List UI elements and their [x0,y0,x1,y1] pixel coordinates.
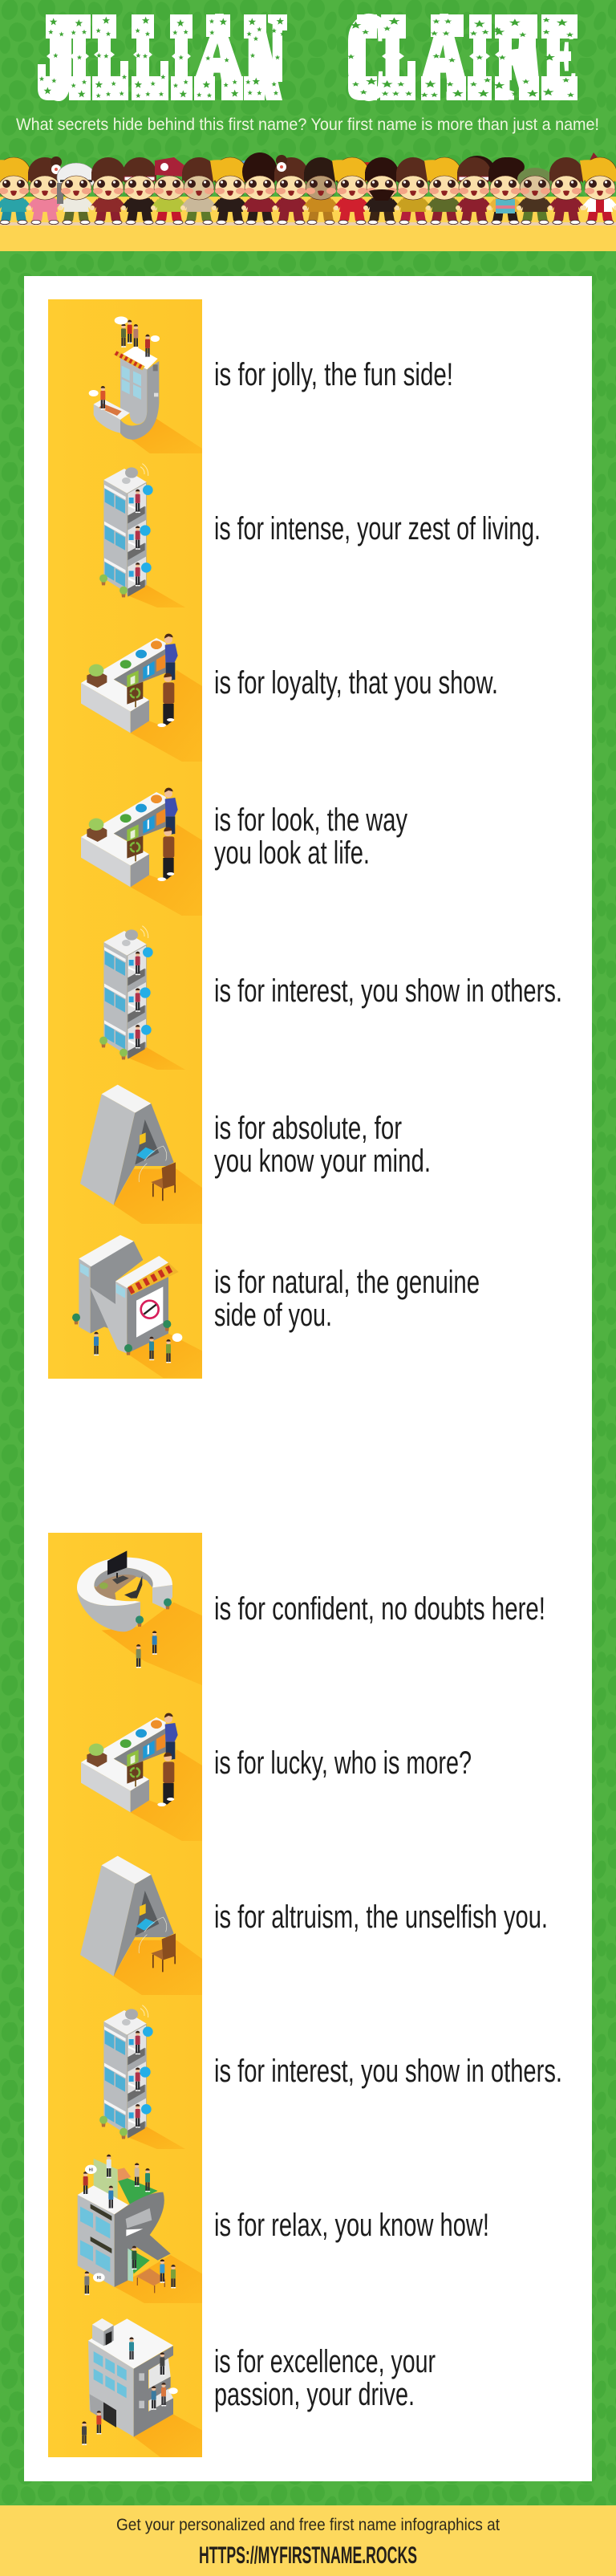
icon: letter L recycling station [81,1713,202,1841]
icon: letter C reception desk [77,1550,202,1685]
caption: L: is for look, the way [214,802,407,838]
icon: letter J building [88,316,202,453]
caption: A: you know your mind. [214,1144,431,1179]
caption: L: you look at life. [214,835,370,871]
last name section: CLAIRE [48,1533,562,2457]
yellow illustration column: JILLIAN [48,299,202,1379]
first name section: JILLIAN [48,299,562,1379]
icon: letter I building [99,463,184,607]
icon: letter I building [99,925,184,1070]
footer url: HTTPS://MYFIRSTNAME.ROCKS [199,2542,417,2569]
icon: letter L recycling station [81,634,202,762]
caption: J: is for jolly, the fun side! [214,357,453,392]
caption: R: is for relax, you know how! [214,2208,489,2243]
caption: A: is for absolute, for [214,1111,402,1146]
word block: JILLIAN slab shapes [38,14,287,100]
caption: N: is for natural, the genuine [214,1265,480,1300]
icon: letter R building [77,2154,202,2303]
caption: L: is for lucky, who is more? [214,1745,472,1781]
icon: letter N building [72,1235,202,1378]
yellow illustration column: CLAIRE [48,1533,202,2457]
icon: letter A with chair [80,1085,202,1224]
caption: E: passion, your drive. [214,2377,415,2412]
main white panel [24,276,592,2481]
crowd of cartoon characters [0,152,616,225]
stars on CLAIRE [347,18,574,97]
footer text: Get your personalized and free first name infographics at [116,2516,500,2534]
word block: CLAIRE slab shapes [348,14,578,100]
icon: letter A with chair [80,1855,202,1995]
icon: letter I building [99,2005,184,2149]
title: JILLIAN CLAIRE [38,0,578,125]
stars on JILLIAN [39,17,285,98]
icon: letter E building [82,2318,202,2457]
caption: N: side of you. [214,1298,332,1333]
footer band [0,2505,616,2576]
caption: L: is for loyalty, that you show. [214,665,498,701]
yellow band under characters [0,197,616,251]
icon: letter L recycling station [81,788,202,916]
caption: E: is for excellence, your [214,2344,436,2379]
